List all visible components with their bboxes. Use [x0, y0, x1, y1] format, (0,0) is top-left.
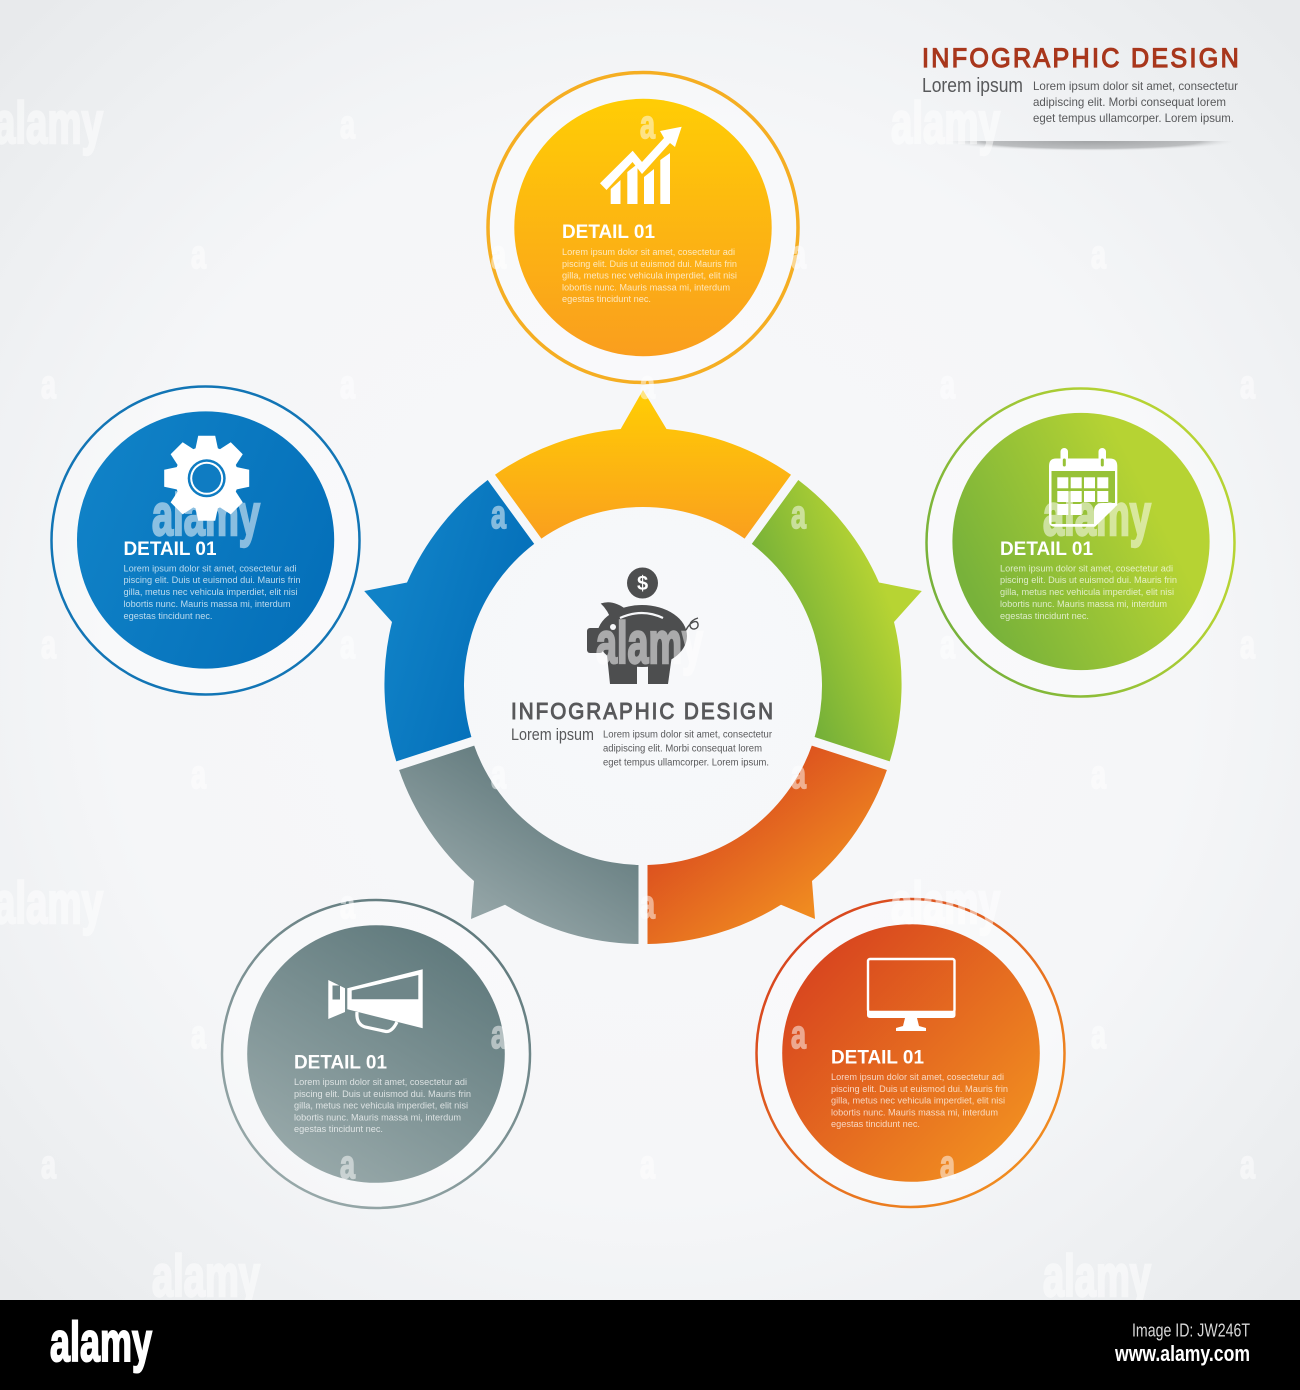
header subtitle: Lorem ipsum — [922, 74, 1023, 97]
watermarks: a — [791, 1013, 807, 1057]
watermarks: a — [340, 623, 356, 667]
panel: yellow detail — [488, 72, 798, 382]
grey disc — [247, 925, 505, 1183]
green body text: egestas tincidunt nec. — [1000, 611, 1089, 622]
green outer ring — [926, 388, 1234, 696]
orange outer ring — [756, 899, 1064, 1207]
footer bar — [0, 1300, 1300, 1390]
watermarks: a — [1240, 363, 1256, 407]
watermarks: a — [791, 233, 807, 277]
watermarks: a — [640, 1143, 656, 1187]
orange body text: gilla, metus nec vehicula imperdiet, elit nisi — [831, 1096, 1005, 1106]
yellow heading: DETAIL 01 — [562, 222, 655, 243]
watermarks: a — [1091, 1013, 1107, 1057]
panel: orange detail — [756, 899, 1064, 1207]
yellow disc — [514, 99, 772, 356]
central segmented ring — [364, 390, 922, 944]
green body text: lobortis nunc. Mauris massa mi, interdum — [1000, 599, 1167, 610]
grey heading: DETAIL 01 — [294, 1052, 387, 1074]
center content — [511, 568, 775, 768]
watermarks: a — [491, 1013, 507, 1057]
icon: monitor — [867, 959, 956, 1031]
header shadow — [945, 141, 1237, 161]
footer image id: Image ID: JW246T — [1132, 1320, 1250, 1340]
watermarks: alamy — [596, 611, 703, 676]
blue body text: egestas tincidunt nec. — [124, 611, 212, 622]
center paragraph — [603, 730, 773, 768]
yellow body text — [562, 247, 737, 305]
icon: piggy bank with coin: $ — [637, 573, 648, 595]
icon: calendar — [1049, 448, 1117, 527]
orange body text: egestas tincidunt nec. — [831, 1119, 920, 1130]
yellow outer ring — [488, 72, 798, 382]
footer url: www.alamy.com — [1114, 1341, 1250, 1366]
blue body text: lobortis nunc. Mauris massa mi, interdum — [124, 599, 290, 610]
segment: grey with arrow — [399, 746, 638, 944]
blue body text: piscing elit. Duis ut euismod dui. Mauris frin — [124, 575, 300, 586]
watermarks: a — [791, 493, 807, 537]
watermarks: a — [791, 753, 807, 797]
segment: green with arrow — [752, 480, 922, 761]
orange body text — [831, 1072, 1008, 1130]
orange body text: piscing elit. Duis ut euismod dui. Mauris frin — [831, 1084, 1008, 1095]
watermarks: a — [940, 1143, 956, 1187]
watermarks: alamy — [891, 91, 1000, 156]
watermarks: a — [340, 1143, 356, 1187]
yellow body text: piscing elit. Duis ut euismod dui. Mauris frin — [562, 259, 737, 270]
watermarks: a — [1240, 623, 1256, 667]
watermarks: a — [340, 883, 356, 927]
orange body text: lobortis nunc. Mauris massa mi, interdum — [831, 1108, 998, 1118]
segment: orange with arrow — [648, 746, 887, 944]
watermarks: a — [491, 753, 507, 797]
watermarks: a — [640, 363, 656, 407]
green body text: Lorem ipsum dolor sit amet, cosectetur adi — [1000, 564, 1173, 574]
grey body text: gilla, metus nec vehicula imperdiet, elit nisi — [294, 1100, 468, 1112]
watermarks: alamy — [152, 1244, 260, 1309]
orange disc — [782, 924, 1040, 1182]
yellow body text: gilla, metus nec vehicula imperdiet, elit nisi — [562, 270, 737, 282]
watermarks: a — [1091, 233, 1107, 277]
watermarks: a — [41, 363, 57, 407]
watermarks: a — [940, 363, 956, 407]
watermarks: a — [191, 753, 207, 797]
watermarks: alamy — [1043, 1244, 1151, 1309]
watermarks: a — [491, 233, 507, 277]
segment: yellow with arrow — [495, 390, 791, 539]
watermarks: alamy — [1043, 483, 1151, 548]
orange body text: Lorem ipsum dolor sit amet, cosectetur adi — [831, 1072, 1004, 1083]
blue body text — [124, 564, 300, 622]
grey body text: lobortis nunc. Mauris massa mi, interdum — [294, 1112, 461, 1124]
grey body text: Lorem ipsum dolor sit amet, cosectetur adi — [294, 1077, 467, 1088]
icon: piggy bank with coin — [587, 568, 698, 684]
panel: blue detail — [52, 386, 360, 694]
watermarks: a — [1240, 1143, 1256, 1187]
yellow body text: lobortis nunc. Mauris massa mi, interdum — [562, 282, 730, 294]
watermarks: a — [191, 233, 207, 277]
watermarks: a — [340, 103, 356, 147]
header title: INFOGRAPHIC DESIGN — [922, 43, 1241, 73]
blue outer ring — [52, 386, 360, 694]
watermarks: a — [41, 1143, 57, 1187]
watermarks: a — [940, 623, 956, 667]
center paragraph: adipiscing elit. Morbi consequat lorem — [603, 744, 762, 754]
header paragraph: adipiscing elit. Morbi consequat lorem — [1033, 95, 1226, 109]
grey body text: piscing elit. Duis ut euismod dui. Mauris frin — [294, 1089, 471, 1100]
icon: gear — [164, 436, 249, 521]
blue body text: Lorem ipsum dolor sit amet, cosectetur adi — [124, 564, 296, 574]
watermarks: a — [491, 493, 507, 537]
watermarks: a — [41, 623, 57, 667]
green disc — [952, 413, 1210, 670]
center paragraph: Lorem ipsum dolor sit amet, consectetur — [603, 730, 773, 740]
green heading: DETAIL 01 — [1000, 539, 1093, 560]
panel: grey detail — [222, 900, 530, 1208]
grey body text — [294, 1077, 471, 1135]
watermarks: a — [640, 103, 656, 147]
green body text: gilla, metus nec vehicula imperdiet, elit nisi — [1000, 587, 1174, 598]
header paragraph: eget tempus ullamcorper. Lorem ipsum. — [1033, 111, 1234, 125]
watermarks: a — [340, 363, 356, 407]
watermarks: alamy — [891, 871, 1000, 936]
blue disc — [77, 411, 334, 669]
watermarks: alamy — [152, 483, 260, 548]
header block — [922, 43, 1241, 161]
center paragraph: eget tempus ullamcorper. Lorem ipsum. — [603, 758, 769, 768]
center subtitle: Lorem ipsum — [511, 726, 594, 744]
header paragraph — [1033, 79, 1238, 125]
icon: rising bar chart — [600, 127, 682, 204]
green body text: piscing elit. Duis ut euismod dui. Mauris frin — [1000, 575, 1177, 586]
watermarks: a — [191, 1013, 207, 1057]
green body text — [1000, 564, 1177, 622]
watermarks: a — [1091, 753, 1107, 797]
footer logo: alamy — [50, 1310, 152, 1373]
blue body text: gilla, metus nec vehicula imperdiet, elit nisi — [124, 587, 298, 598]
panel: green detail — [926, 388, 1234, 696]
orange heading: DETAIL 01 — [831, 1048, 924, 1068]
grey outer ring — [222, 900, 530, 1208]
watermarks: a — [640, 883, 656, 927]
center title: INFOGRAPHIC DESIGN — [511, 698, 775, 724]
yellow body text: egestas tincidunt nec. — [562, 294, 651, 305]
yellow body text: Lorem ipsum dolor sit amet, cosectetur adi — [562, 247, 735, 258]
segment: blue with arrow — [364, 480, 534, 761]
blue heading: DETAIL 01 — [124, 539, 217, 560]
header paragraph: Lorem ipsum dolor sit amet, consectetur — [1033, 79, 1238, 93]
grey body text: egestas tincidunt nec. — [294, 1124, 383, 1135]
icon: megaphone — [328, 969, 423, 1032]
